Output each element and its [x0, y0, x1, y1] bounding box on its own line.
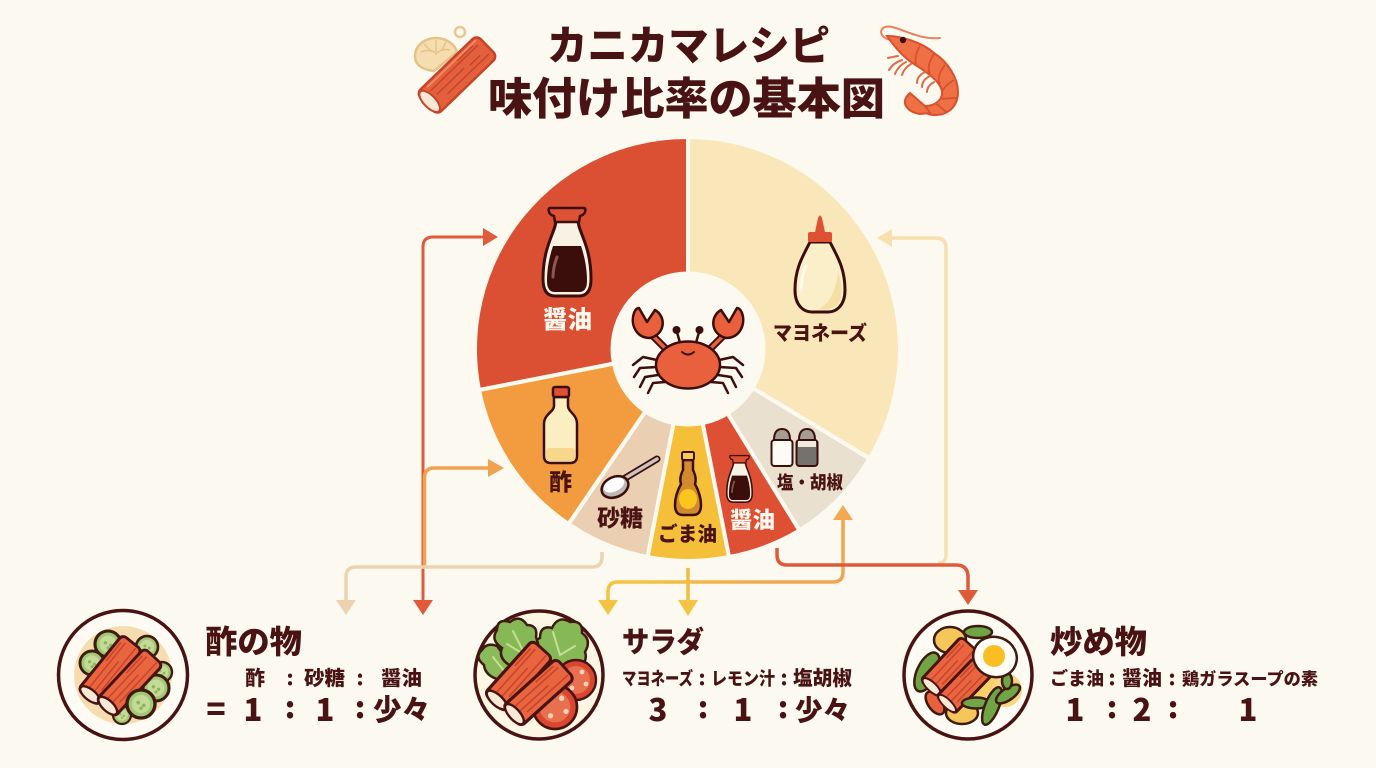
ingredient row: salad: :	[698, 662, 706, 691]
icon: stir-fry plate	[904, 611, 1032, 739]
ingredient row: stir-fry: 醤油	[1122, 667, 1162, 690]
ratio row: sunomono: 1	[244, 685, 262, 730]
heading: sunomono: 酢の物	[205, 624, 302, 660]
ingredient row: stir-fry: :	[1108, 662, 1116, 691]
arrow: sugar to sunomono	[336, 552, 602, 615]
ratio row: salad: 少々	[795, 695, 850, 726]
icon: sesame oil bottle	[675, 452, 701, 515]
slice: sugar	[568, 349, 688, 557]
ratio row: sunomono: 1	[316, 685, 334, 730]
ingredient row: sunomono: :	[286, 662, 294, 691]
slice: salt and pepper	[688, 349, 870, 530]
arrow: vinegar to sunomono	[424, 459, 504, 567]
ingredient row: salad: :	[780, 662, 788, 691]
ingredient row: stir-fry	[1050, 662, 1318, 691]
ingredient row: stir-fry: :	[1168, 662, 1176, 691]
ratio row: salad: :	[698, 683, 708, 727]
recipe: stir-fry	[904, 611, 1318, 739]
ratio row: stir-fry: :	[1107, 683, 1117, 727]
heading: stir-fry: 炒め物	[1050, 624, 1147, 660]
ingredient row: stir-fry: 鶏ガラスープの素	[1182, 669, 1318, 689]
ratio row: sunomono	[206, 683, 430, 731]
slice: vinegar	[479, 349, 688, 524]
icon: vinegar bottle	[544, 387, 577, 463]
slice: soy sauce small	[688, 349, 800, 557]
slice: sesame oil	[648, 349, 729, 561]
ratio row: stir-fry: 1	[1239, 685, 1257, 730]
arrow: soy sauce to stir-fry	[777, 548, 978, 605]
arrow: soy sauce to sunomono	[413, 228, 498, 615]
arrow: salad to salt and pepper	[598, 505, 853, 615]
arrow: sesame oil to salad	[678, 568, 698, 616]
ratio row: salad: 1	[734, 685, 752, 730]
title: カニカマレシピ	[547, 23, 830, 69]
connector arrows	[336, 228, 978, 616]
heading: salad: サラダ	[622, 625, 704, 659]
center hub	[610, 272, 766, 426]
icon: sunomono plate	[58, 610, 188, 740]
label: soy sauce large: 醤油	[543, 306, 592, 334]
ratio row: sunomono: :	[355, 683, 365, 727]
pie chart	[475, 137, 900, 561]
ingredient row: sunomono: 砂糖	[304, 667, 345, 690]
ratio row: salad	[649, 683, 850, 730]
ingredient row: salad	[622, 662, 852, 691]
label: mayonnaise: マヨネーズ	[773, 321, 867, 345]
label: soy sauce small: 醤油	[730, 508, 775, 533]
icon: salt and pepper shakers	[772, 429, 818, 466]
label: sesame oil: ごま油	[658, 522, 717, 546]
ratio row: sunomono: =	[206, 685, 226, 731]
ratio row: stir-fry: 1	[1066, 685, 1084, 730]
ingredient row: sunomono: 酢	[245, 666, 265, 690]
ingredient row: sunomono: 醤油	[381, 667, 422, 690]
ratio row: salad: 3	[649, 685, 667, 730]
ingredient row: salad: 塩胡椒	[793, 666, 852, 690]
ratio row: sunomono: 少々	[373, 694, 430, 727]
title: 味付け比率の基本図	[488, 75, 885, 124]
icon: mayonnaise bottle	[795, 216, 845, 312]
label: vinegar: 酢	[549, 469, 572, 495]
label: salt and pepper: 塩・胡椒	[777, 472, 843, 493]
slice: soy sauce large	[475, 137, 688, 390]
label: sugar: 砂糖	[597, 505, 643, 531]
ratio row: sunomono: :	[285, 683, 295, 727]
ratio row: salad: :	[778, 683, 788, 727]
title	[488, 23, 885, 124]
ratio row: stir-fry: :	[1168, 683, 1178, 727]
ingredient row: sunomono: :	[356, 662, 364, 691]
icon: large soy sauce bottle	[543, 208, 591, 296]
icon: crab stick and dumpling	[415, 27, 498, 116]
arrow: mayonnaise from stir-fry side	[877, 229, 946, 563]
icon: salad plate	[475, 611, 603, 739]
slice: mayonnaise	[688, 137, 900, 458]
ingredient row: stir-fry: ごま油	[1050, 668, 1104, 689]
icon: shrimp	[881, 27, 958, 115]
icon: sugar spoon	[598, 459, 657, 502]
ingredient row: sunomono	[245, 662, 422, 691]
ratio row: stir-fry: 2	[1133, 685, 1151, 730]
ratio row: stir-fry	[1066, 683, 1257, 730]
recipe: salad	[475, 611, 852, 739]
icon: crab	[633, 308, 743, 393]
ingredient row: salad: マヨネーズ	[622, 668, 693, 689]
ingredient row: salad: レモン汁	[711, 669, 775, 689]
recipe: sunomono	[58, 610, 430, 740]
icon: small soy sauce bottle	[727, 456, 752, 502]
